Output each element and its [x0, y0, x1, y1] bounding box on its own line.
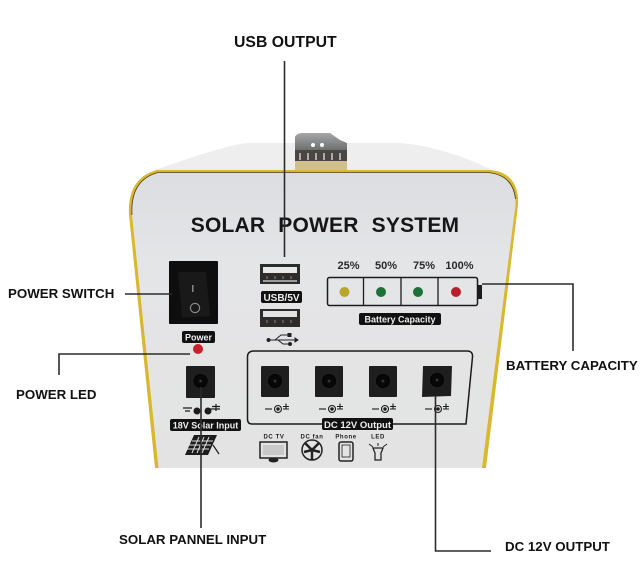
- icon: solar panel: [185, 435, 219, 455]
- label: power: Power: [185, 332, 212, 342]
- battery percent labels: 25%: [337, 260, 360, 272]
- icon: LED bulb: LED: [371, 434, 385, 440]
- device front panel: [129, 170, 518, 468]
- label: DC 12V output: DC 12V OUTPUT: [505, 539, 610, 554]
- carrying handle clasp: [295, 133, 347, 170]
- leader: solar panel input: [200, 387, 202, 528]
- battery percent labels: [337, 260, 474, 272]
- leader: battery capacity: [482, 284, 573, 351]
- icon: USB symbol: [267, 334, 298, 346]
- leader: USB output: [284, 61, 286, 257]
- label: DC 12V output: DC 12V Output: [324, 420, 392, 431]
- icon: DC fan: DC fan: [301, 434, 323, 440]
- solar input jack: [186, 366, 215, 398]
- battery percent labels: 100%: [445, 260, 474, 272]
- heading: solar power system: SOLAR POWER SYSTEM: [191, 214, 459, 237]
- power switch: [169, 261, 218, 324]
- label: power LED: POWER LED: [16, 387, 97, 402]
- label: solar pannel input: SOLAR PANNEL INPUT: [119, 532, 266, 547]
- USB ports: [260, 264, 300, 327]
- solar polarity symbols: [183, 404, 220, 414]
- DC 12V output frame: [248, 351, 473, 424]
- icon: DC fan: [301, 434, 323, 460]
- icon: phone: [335, 434, 357, 461]
- DC polarity symbols: [265, 404, 449, 412]
- icon: DC TV: DC TV: [264, 434, 284, 440]
- label: battery capacity: Battery Capacity: [364, 314, 436, 324]
- battery percent labels: 75%: [413, 260, 435, 272]
- label: power: [182, 331, 215, 343]
- label: USB/5V: USB/5V: [263, 293, 300, 304]
- icon: phone: Phone: [335, 434, 357, 440]
- device top cover: [152, 143, 494, 171]
- label: USB output: USB OUTPUT: [234, 34, 337, 51]
- battery capacity indicator: [328, 277, 482, 306]
- battery percent labels: 50%: [375, 260, 397, 272]
- label: battery capacity: BATTERY CAPACITY: [506, 358, 638, 373]
- label: power switch: POWER SWITCH: [8, 286, 114, 301]
- leader: power switch: [125, 293, 172, 295]
- power LED: [193, 344, 203, 354]
- DC output jacks: [261, 366, 452, 397]
- leader: DC 12V output: [436, 396, 491, 551]
- icon: DC TV: [260, 434, 287, 462]
- icon: LED bulb: [369, 434, 387, 460]
- leader: power LED: [59, 354, 190, 375]
- label: 18V solar input: 18V Solar Input: [173, 420, 238, 430]
